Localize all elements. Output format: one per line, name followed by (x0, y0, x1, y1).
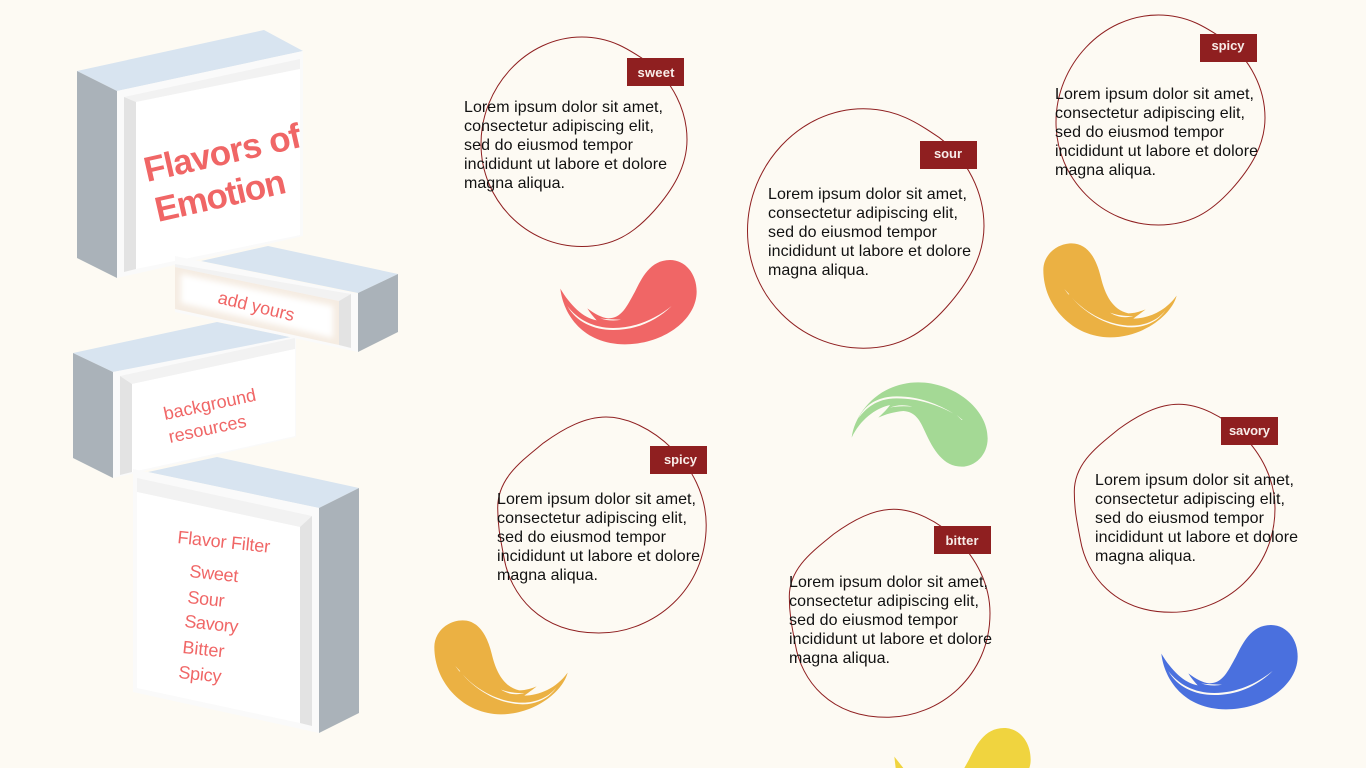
body text: sed do eiusmod tempor (1095, 510, 1265, 527)
icon: blue feather swoosh (1161, 625, 1298, 709)
flavor filter list: Spicy (178, 662, 222, 686)
outline blob (748, 109, 984, 348)
body text: incididunt ut labore et dolore (1095, 529, 1298, 546)
tag (627, 58, 684, 86)
box: flavor filter (133, 457, 359, 733)
body text: magna aliqua. (768, 262, 869, 279)
background resources text: resources (167, 411, 248, 447)
card: sour (748, 109, 984, 348)
card: spicy bottom (497, 417, 707, 633)
box: background resources (73, 322, 296, 478)
flavor filter list: Savory (184, 611, 239, 637)
body text: Lorem ipsum dolor sit amet, (1055, 86, 1254, 103)
outline blob (1056, 15, 1265, 225)
body text: Lorem ipsum dolor sit amet, (464, 99, 663, 116)
icon: green feather swoosh (852, 382, 988, 467)
tag (934, 526, 991, 554)
flavor filter list: Flavor Filter (177, 527, 271, 557)
body text: sed do eiusmod tempor (1055, 124, 1225, 141)
body text (497, 491, 700, 584)
title text (144, 122, 300, 222)
body text: incididunt ut labore et dolore (789, 631, 992, 648)
flavor filter list: Sour (187, 587, 225, 611)
card: sweet (464, 37, 687, 246)
body text: incididunt ut labore et dolore (497, 548, 700, 565)
body text: Lorem ipsum dolor sit amet, (1095, 472, 1294, 489)
flavor filter list: Bitter (182, 637, 225, 661)
body text: consectetur adipiscing elit, (768, 205, 958, 222)
card: savory (1074, 404, 1298, 612)
flavor filter list (177, 527, 271, 686)
box: title (77, 30, 305, 278)
tag (1200, 34, 1257, 62)
body text: consectetur adipiscing elit, (789, 593, 979, 610)
body text: magna aliqua. (1095, 548, 1196, 565)
body text: Lorem ipsum dolor sit amet, (497, 491, 696, 508)
body text: incididunt ut labore et dolore (768, 243, 971, 260)
body text (464, 99, 667, 192)
flavor filter list: Sweet (189, 561, 239, 586)
body text: consectetur adipiscing elit, (497, 510, 687, 527)
body text: magna aliqua. (464, 175, 565, 192)
body text (789, 574, 992, 667)
tag: savory (1229, 423, 1271, 438)
title text: Flavors of (140, 116, 305, 190)
body text: sed do eiusmod tempor (464, 137, 634, 154)
outline blob (481, 37, 687, 246)
body text: consectetur adipiscing elit, (1055, 105, 1245, 122)
background resources text: background (162, 385, 258, 424)
body text (1055, 86, 1258, 179)
outline blob (498, 417, 706, 633)
tag: bitter (946, 533, 978, 548)
body text: magna aliqua. (497, 567, 598, 584)
background resources text (162, 385, 258, 447)
tag (1221, 417, 1278, 445)
title text: Emotion (151, 162, 289, 230)
tag: spicy (1212, 38, 1245, 53)
icon: yellow feather swoosh (894, 728, 1031, 768)
body text: magna aliqua. (1055, 162, 1156, 179)
body text: incididunt ut labore et dolore (1055, 143, 1258, 160)
tag: sweet (638, 65, 675, 80)
icon: orange feather swoosh lower (434, 620, 568, 714)
body text: incididunt ut labore et dolore (464, 156, 667, 173)
body text: consectetur adipiscing elit, (464, 118, 654, 135)
body text: sed do eiusmod tempor (768, 224, 938, 241)
body text: consectetur adipiscing elit, (1095, 491, 1285, 508)
body text: Lorem ipsum dolor sit amet, (768, 186, 967, 203)
tag (920, 141, 977, 169)
icon: orange feather swoosh (1043, 243, 1177, 337)
body text: sed do eiusmod tempor (497, 529, 667, 546)
card: spicy top (1055, 15, 1265, 225)
body text: Lorem ipsum dolor sit amet, (789, 574, 988, 591)
body text (1095, 472, 1298, 565)
outline blob (1074, 404, 1275, 612)
body text: sed do eiusmod tempor (789, 612, 959, 629)
tag: spicy (664, 452, 698, 467)
tag (650, 446, 707, 474)
card: bitter (789, 509, 992, 717)
body text: magna aliqua. (789, 650, 890, 667)
outline blob (789, 509, 990, 717)
tag: sour (934, 146, 962, 161)
icon: red feather swoosh (560, 260, 697, 344)
box: add yours (175, 246, 398, 352)
add yours text: add yours (216, 287, 297, 325)
body text (768, 186, 971, 279)
